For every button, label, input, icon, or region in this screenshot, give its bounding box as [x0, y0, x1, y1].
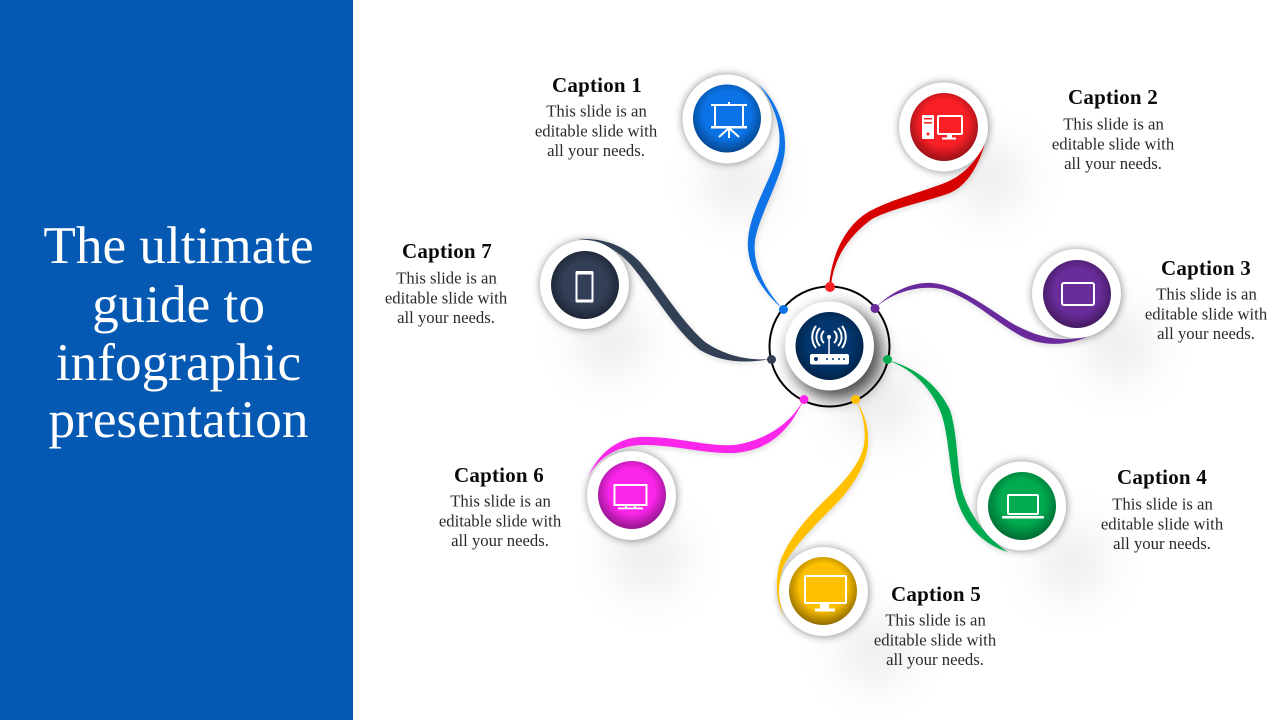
- caption 1: [535, 73, 658, 160]
- left title panel: [0, 0, 353, 720]
- caption 3: [1145, 256, 1268, 343]
- caption 2: editable slide with: [1052, 134, 1175, 154]
- icon: projector screen: [711, 102, 747, 138]
- icon: router: [810, 326, 849, 364]
- caption 1: This slide is an: [546, 102, 647, 120]
- caption 3: all your needs.: [1157, 324, 1255, 343]
- node 7: phone: [540, 240, 629, 329]
- caption 4: editable slide with: [1101, 514, 1224, 534]
- caption 5: Caption 5: [891, 582, 981, 606]
- title: The ultimate: [43, 216, 314, 275]
- ribbon: pink: [588, 399, 804, 477]
- caption 6: [439, 463, 562, 550]
- caption 2: [1052, 85, 1175, 173]
- icon: desktop computer: [922, 115, 962, 140]
- caption 7: Caption 7: [402, 239, 492, 263]
- caption 3: This slide is an: [1156, 284, 1257, 304]
- icon: laptop: [1002, 495, 1044, 518]
- icon: monitor: [805, 576, 846, 612]
- caption 2: Caption 2: [1068, 85, 1158, 109]
- caption 3: editable slide with: [1145, 304, 1268, 324]
- title: infographic: [56, 333, 301, 392]
- caption 7: all your needs.: [397, 308, 495, 327]
- icon: display: [614, 485, 646, 509]
- node 6: display: [587, 451, 676, 540]
- caption 6: editable slide with: [439, 512, 562, 530]
- soft drop shadows: [540, 74, 1154, 684]
- caption 1: editable slide with: [535, 122, 658, 140]
- ribbon: blue: [748, 84, 785, 309]
- ribbon: yellow: [777, 399, 868, 616]
- node 1: presentation: [682, 74, 772, 164]
- central ring: [770, 286, 890, 406]
- ribbon: red: [829, 125, 989, 287]
- title: presentation: [49, 390, 308, 449]
- caption 6: all your needs.: [451, 531, 549, 550]
- caption 7: This slide is an: [396, 268, 497, 288]
- node 2: desktop computer: [899, 82, 988, 172]
- caption 5: [874, 582, 997, 669]
- ribbon: green: [887, 360, 1008, 552]
- caption 5: editable slide with: [874, 630, 997, 650]
- caption 2: This slide is an: [1063, 114, 1164, 134]
- node 3: tablet: [1032, 249, 1121, 338]
- caption 1: Caption 1: [552, 73, 642, 97]
- icon: tablet: [1062, 283, 1094, 305]
- node 5: monitor: [779, 547, 868, 636]
- caption 4: all your needs.: [1113, 534, 1211, 553]
- ring connector dots: [767, 282, 892, 404]
- icon: phone: [576, 271, 594, 302]
- ribbon: purple: [875, 283, 1087, 344]
- node 4: laptop: [977, 462, 1066, 550]
- caption 6: Caption 6: [454, 463, 544, 487]
- title: guide to: [92, 275, 265, 334]
- caption 5: This slide is an: [885, 610, 986, 630]
- caption 1: all your needs.: [547, 141, 645, 160]
- caption 4: Caption 4: [1117, 465, 1207, 489]
- caption 5: all your needs.: [886, 650, 984, 669]
- caption 6: This slide is an: [450, 492, 551, 510]
- caption 4: This slide is an: [1112, 494, 1213, 514]
- caption 4: [1101, 465, 1224, 553]
- hub: router: [785, 302, 874, 390]
- caption 7: [385, 239, 508, 327]
- caption 2: all your needs.: [1064, 154, 1162, 173]
- caption 7: editable slide with: [385, 288, 508, 308]
- caption 3: Caption 3: [1161, 256, 1251, 280]
- ribbon: dark: [577, 239, 771, 362]
